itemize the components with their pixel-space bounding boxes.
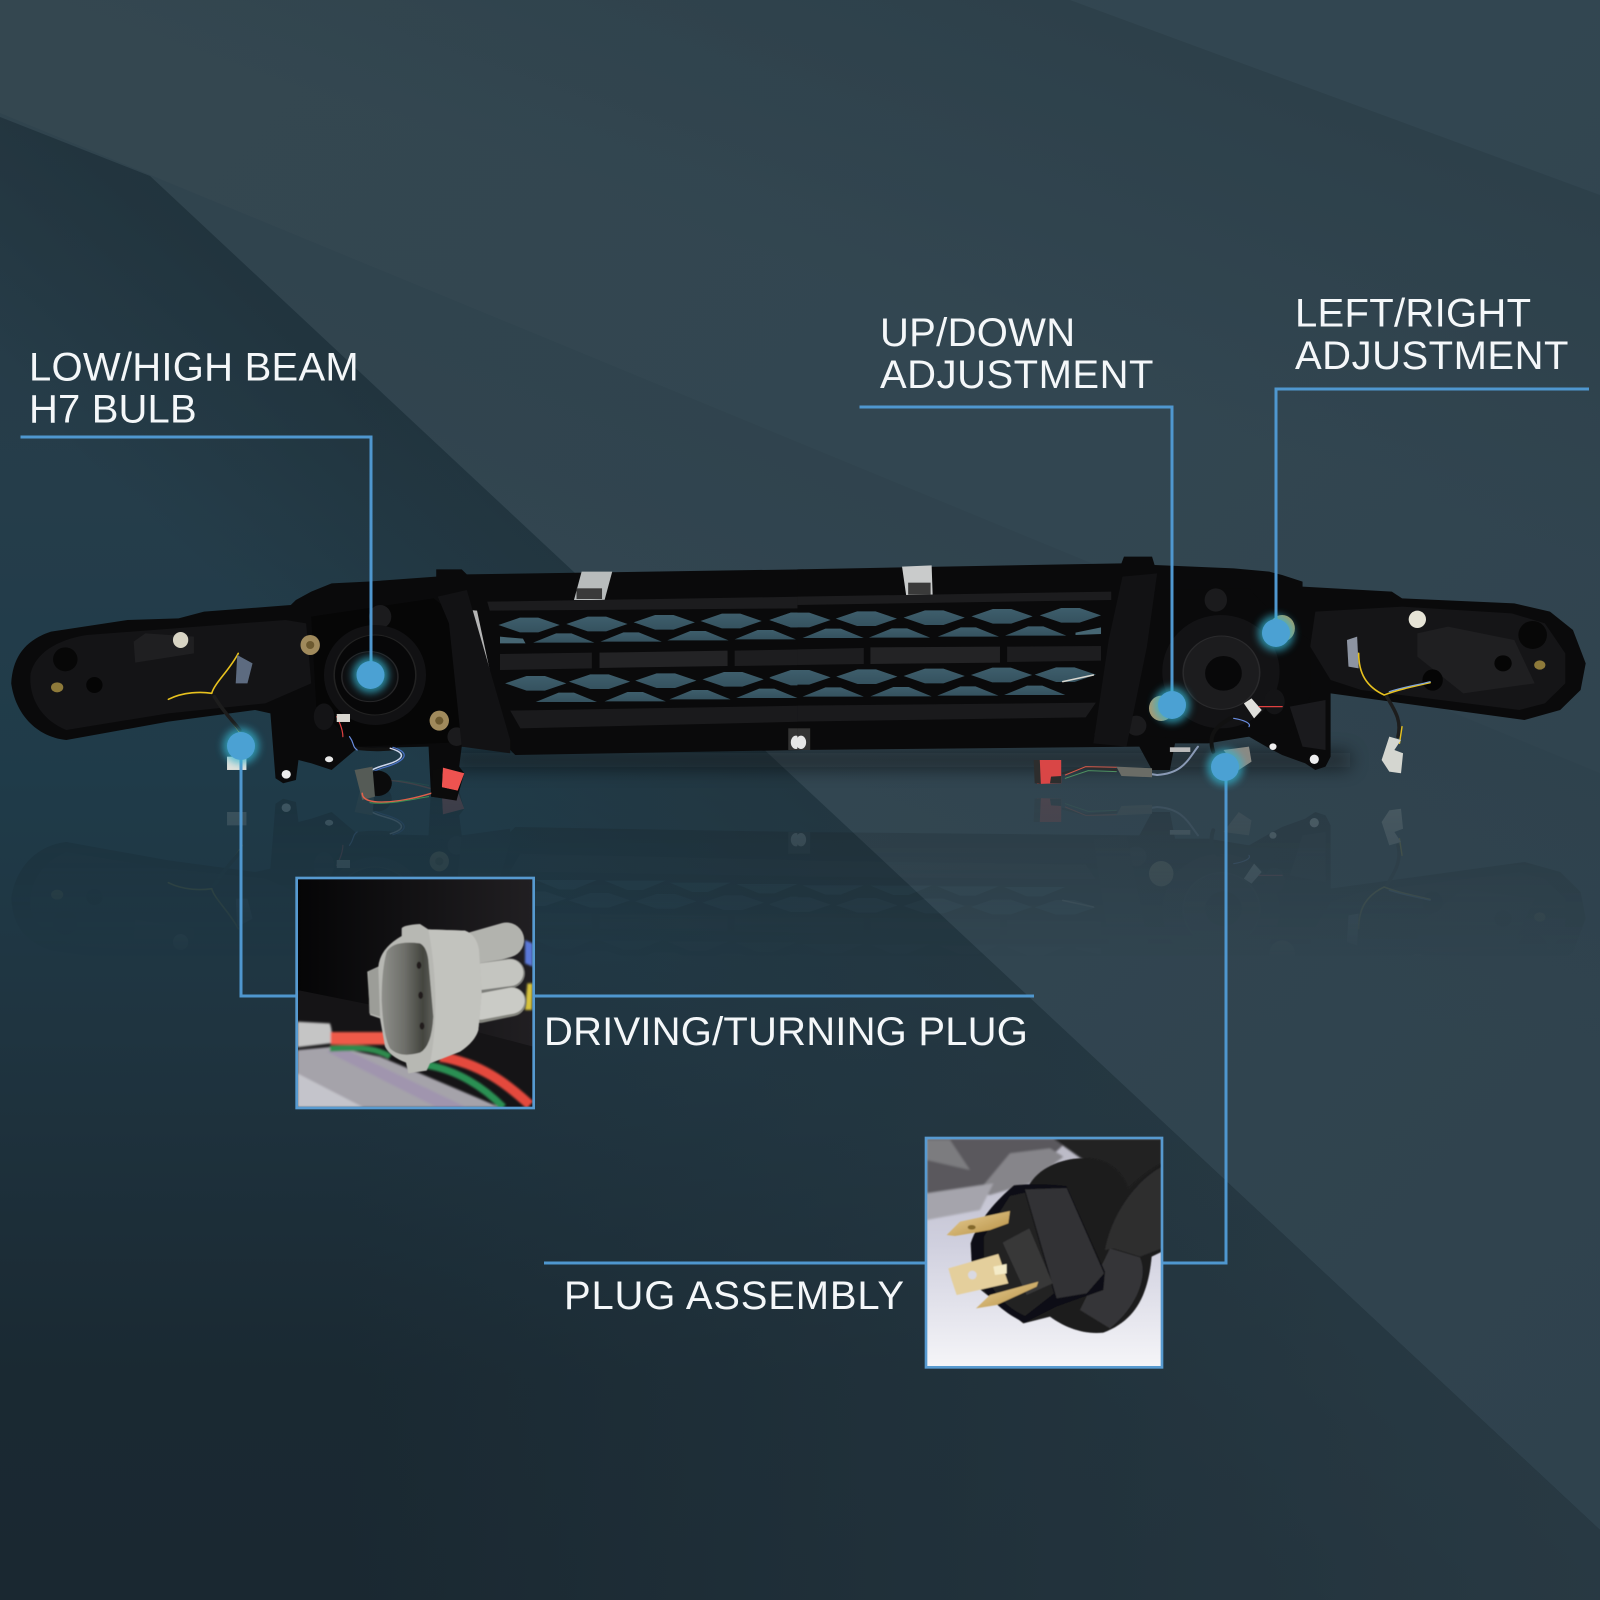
label: driving/turning plug: DRIVING/TURNING PLUG bbox=[544, 1010, 1028, 1054]
marker: low/high beam bulb bbox=[352, 657, 388, 693]
leader line: driving/turning plug bbox=[241, 746, 297, 996]
wire boots bbox=[472, 940, 507, 950]
headlamp assembly bbox=[11, 557, 1586, 803]
connector face bbox=[971, 1184, 1105, 1323]
panel: plug assembly photo bbox=[926, 1138, 1162, 1367]
marker: left/right adjustment bbox=[1258, 615, 1294, 651]
marker: plug assembly bbox=[1207, 749, 1243, 785]
brass terminals bbox=[947, 1211, 1010, 1236]
leader line: up/down adjustment bbox=[860, 407, 1172, 705]
marker: up/down adjustment bbox=[1154, 687, 1190, 723]
label: low/high beam H7 bulb: LOW/HIGH BEAM bbox=[29, 346, 359, 390]
rubber boot bbox=[977, 1158, 1162, 1333]
panel: driving/turning plug photo bbox=[297, 878, 534, 1108]
leader line: plug assembly bbox=[1163, 767, 1226, 1263]
label: up/down adjustment: ADJUSTMENT bbox=[880, 353, 1154, 397]
rule: plug assembly bbox=[544, 1262, 925, 1264]
label: low/high beam H7 bulb: H7 BULB bbox=[29, 388, 197, 432]
photo frame bbox=[926, 1138, 1162, 1367]
label: left/right adjustment: ADJUSTMENT bbox=[1295, 334, 1569, 378]
rule: driving/turning plug bbox=[534, 994, 1034, 998]
grey base surface bbox=[297, 1047, 500, 1107]
leader line: left/right adjustment bbox=[1276, 389, 1589, 633]
leader line: low/high beam bbox=[20, 437, 371, 675]
label: up/down adjustment: UP/DOWN bbox=[880, 311, 1075, 355]
background shapes bbox=[927, 1139, 1064, 1194]
photo frame bbox=[297, 878, 534, 1108]
label: left/right adjustment bbox=[1295, 292, 1569, 378]
contact shadow under headlamp bbox=[450, 752, 1350, 768]
label: up/down adjustment bbox=[880, 311, 1154, 397]
label: left/right adjustment: LEFT/RIGHT bbox=[1295, 292, 1531, 336]
plug housing bbox=[367, 924, 482, 1073]
reflection of headlamp on floor bbox=[168, 780, 1430, 912]
label: plug assembly: PLUG ASSEMBLY bbox=[564, 1274, 905, 1318]
label: low/high beam H7 bulb bbox=[29, 346, 359, 432]
marker: driving/turning plug bbox=[223, 728, 259, 764]
